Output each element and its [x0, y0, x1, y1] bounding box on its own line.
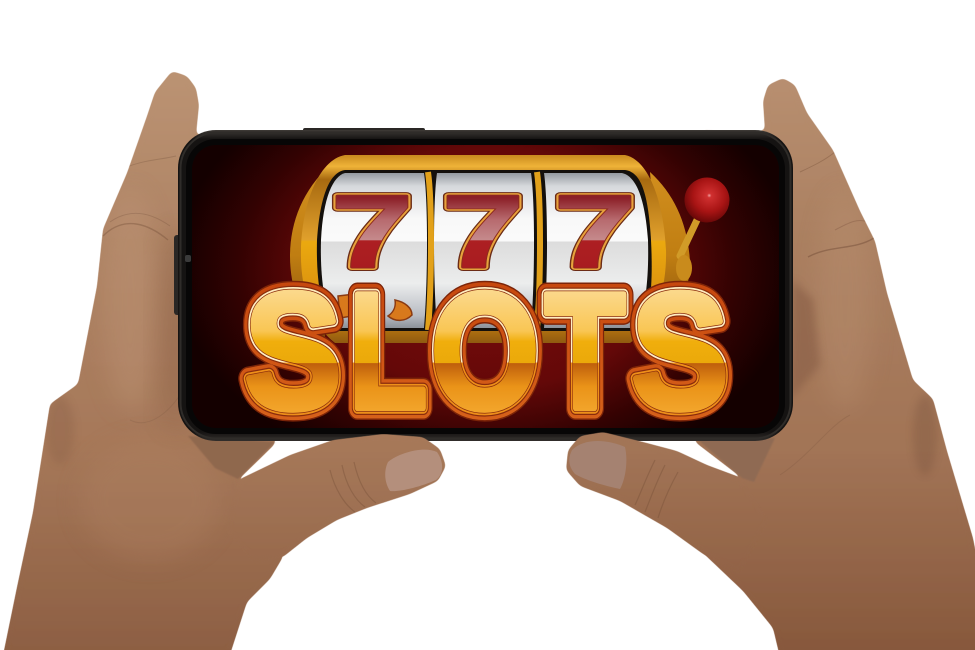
letter L: L — [349, 260, 427, 444]
letter S: S — [245, 258, 341, 443]
letter T: T — [545, 259, 625, 443]
seven 1: 7 — [331, 173, 413, 289]
seven 1 — [332, 192, 412, 271]
lever joint — [676, 255, 692, 281]
seven 3: 7 — [554, 173, 636, 289]
phone rim highlight — [180, 132, 790, 438]
left drum — [290, 176, 326, 337]
letter S: S — [245, 258, 341, 443]
letter S: S — [245, 258, 341, 443]
reel 1 — [321, 173, 427, 328]
slots title — [238, 280, 734, 422]
sevens — [332, 192, 635, 271]
letter O: O — [431, 260, 539, 444]
letter T: T — [545, 259, 625, 443]
left thumb — [225, 434, 446, 565]
reel divider 1 — [428, 172, 431, 330]
seven 3: 7 — [554, 173, 636, 289]
seven 2: 7 — [442, 173, 524, 289]
letter O: O — [431, 260, 539, 444]
letter L: L — [349, 260, 427, 444]
letter L: L — [349, 260, 427, 444]
right drum — [650, 172, 690, 282]
letter S: S — [245, 258, 341, 443]
letter O: O — [431, 260, 539, 444]
lever ball — [684, 178, 730, 222]
earpiece details — [185, 255, 191, 262]
screen background — [192, 145, 779, 428]
letter T — [536, 282, 634, 420]
screen — [192, 145, 779, 444]
letter S: S — [632, 258, 728, 443]
reel 2 — [434, 173, 534, 328]
letter T: T — [545, 259, 625, 443]
phone side buttons — [174, 235, 181, 315]
left hand: finger under the phone — [188, 436, 275, 479]
letter T: T — [545, 259, 625, 443]
phone body — [178, 130, 793, 441]
seven 1: 7 — [331, 173, 413, 289]
right hand: finger under the phone — [696, 438, 775, 482]
right hand — [667, 78, 975, 650]
letter L: L — [349, 260, 427, 444]
letter T: T — [545, 259, 625, 443]
reel 3 — [544, 173, 648, 328]
seven 2: 7 — [442, 173, 524, 289]
phone — [174, 128, 793, 441]
seven 3: 7 — [554, 173, 636, 289]
letter S: S — [632, 258, 728, 443]
lever rod — [680, 220, 697, 256]
left thumb creases — [330, 462, 376, 512]
right thumb nail — [569, 441, 626, 489]
letter S: S — [632, 258, 728, 443]
left hand — [0, 71, 283, 650]
seven 3 — [554, 192, 635, 271]
partial reel symbol — [338, 294, 412, 320]
letter O: O — [431, 260, 539, 444]
phone top button — [303, 128, 425, 132]
right thumb creases — [635, 460, 678, 518]
left thumb nail — [385, 450, 442, 491]
phone bezel — [186, 139, 785, 434]
letter L: L — [349, 260, 427, 444]
letter S: S — [245, 258, 341, 443]
reel divider 2 — [537, 172, 540, 330]
reel window — [317, 170, 652, 331]
seven 1: 7 — [331, 173, 413, 289]
letter S: S — [632, 258, 728, 443]
letter O: O — [431, 260, 539, 444]
letter S: S — [245, 258, 341, 443]
letter S: S — [632, 258, 728, 443]
machine body — [301, 155, 666, 343]
letter S: S — [632, 258, 728, 443]
seven 2: 7 — [442, 173, 524, 289]
seven 3: 7 — [554, 173, 636, 289]
seven 2: 7 — [442, 173, 524, 289]
right thumb — [566, 432, 770, 575]
letter T: T — [545, 259, 625, 443]
slot machine — [290, 155, 730, 343]
letter L: L — [349, 260, 427, 444]
letter O: O — [431, 260, 539, 444]
seven 2 — [442, 192, 523, 271]
seven 1: 7 — [331, 173, 413, 289]
